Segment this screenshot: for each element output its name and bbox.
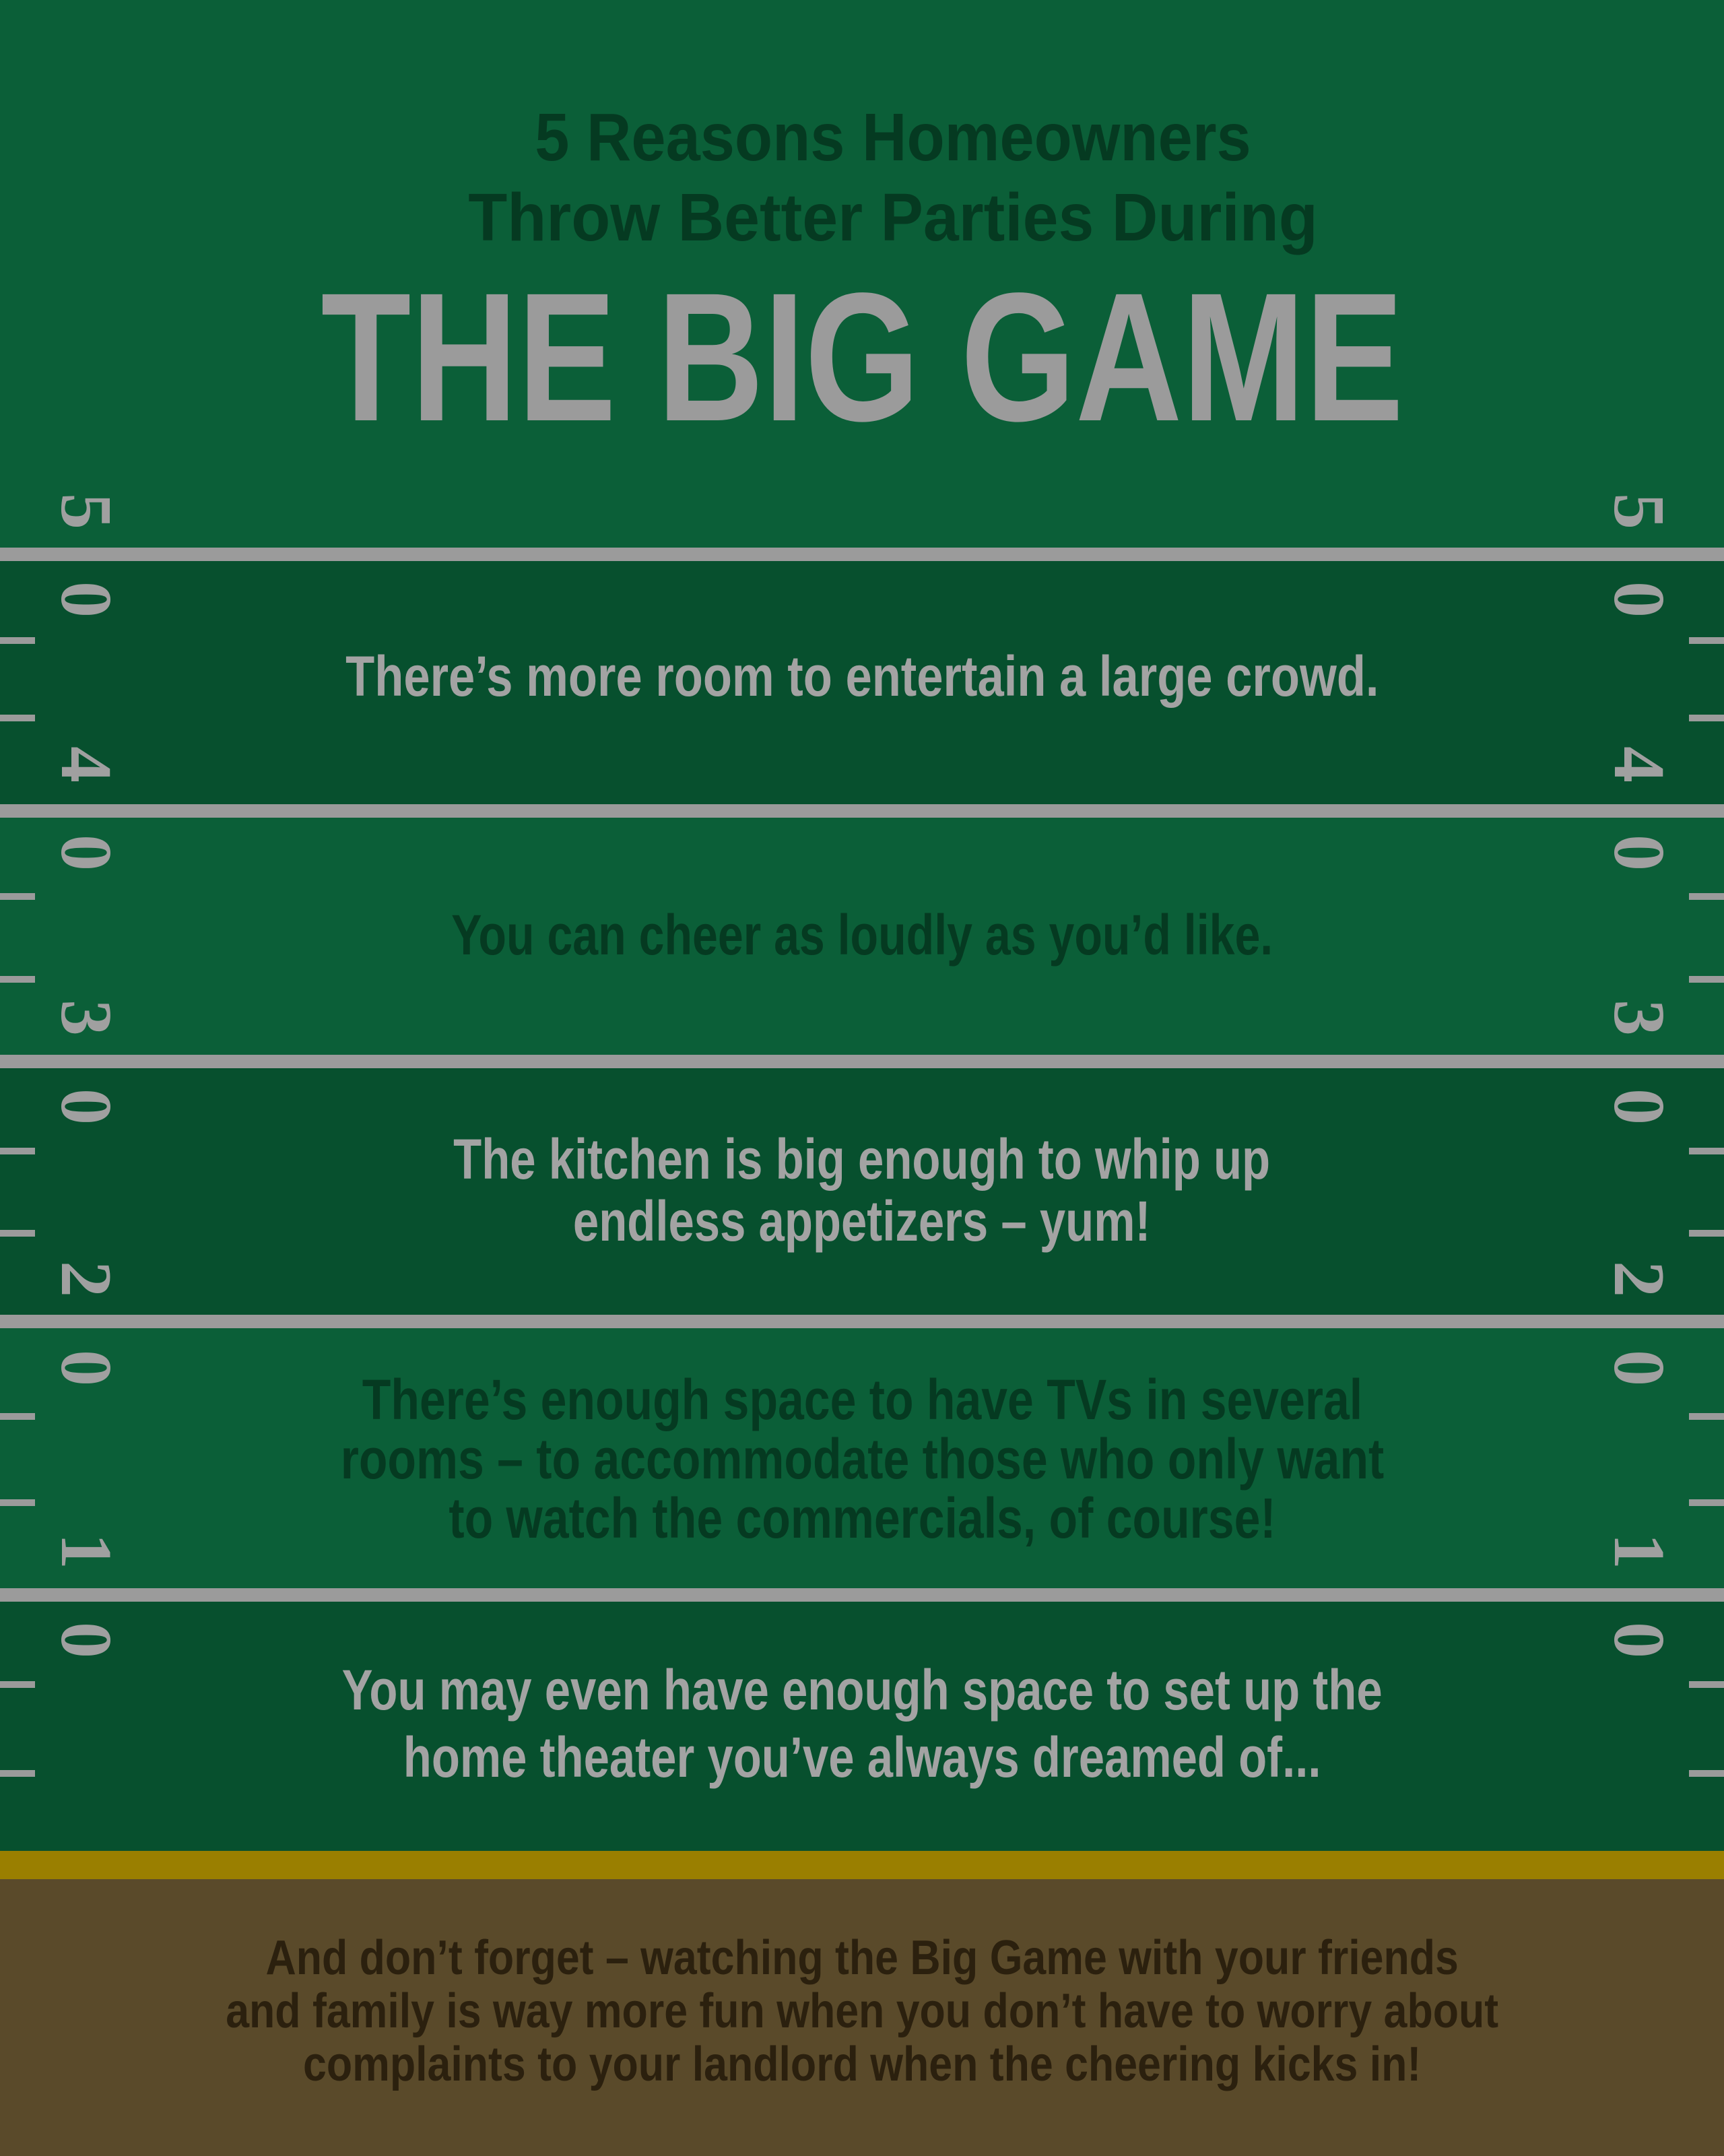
yard numbers left: 2 <box>46 1261 126 1297</box>
reason 2: You can cheer as loudly as you’d like. <box>451 903 1273 967</box>
reason 1: There’s more room to entertain a large crowd. <box>345 645 1379 708</box>
footer text: And don’t forget – watching the Big Game with your friends <box>265 1931 1459 1985</box>
panel: band 1 <box>0 561 1724 804</box>
panel: band 3 <box>0 1068 1724 1315</box>
yard numbers right: 0 <box>1599 1088 1679 1125</box>
yard numbers left: 5 <box>46 493 126 529</box>
yard numbers right <box>1599 493 1679 1658</box>
reason 5: home theater you’ve always dreamed of... <box>403 1726 1321 1789</box>
title line 2: Throw Better Parties During <box>468 180 1318 255</box>
yard numbers left: 4 <box>46 746 126 783</box>
reason 4 <box>340 1368 1384 1550</box>
panel: yellow goal line <box>0 1851 1724 1879</box>
yard numbers right: 3 <box>1599 1000 1679 1036</box>
yard numbers left: 1 <box>46 1533 126 1569</box>
footer text: complaints to your landlord when the cheering kicks in! <box>303 2037 1421 2091</box>
yard numbers left: 0 <box>46 1088 126 1125</box>
yard numbers right: 2 <box>1599 1261 1679 1297</box>
yard numbers right: 4 <box>1599 746 1679 783</box>
reason 4: rooms – to accommodate those who only want <box>340 1427 1384 1491</box>
yard numbers left: 0 <box>46 835 126 871</box>
title line 1: 5 Reasons Homeowners <box>535 100 1251 175</box>
footer text: and family is way more fun when you don’t have to worry about <box>226 1984 1498 2038</box>
yard numbers right: 1 <box>1599 1533 1679 1569</box>
yard numbers right: 0 <box>1599 1350 1679 1386</box>
panel: band 2 <box>0 818 1724 1055</box>
panel: band 5 <box>0 1602 1724 1851</box>
hash marks left <box>0 637 35 1777</box>
yard numbers left: 0 <box>46 1350 126 1386</box>
yard numbers left: 0 <box>46 581 126 618</box>
reason 4: to watch the commercials, of course! <box>449 1487 1275 1550</box>
footer text <box>226 1931 1498 2091</box>
hash marks right <box>1689 637 1724 1777</box>
yard numbers left: 0 <box>46 1622 126 1658</box>
reason 4: There’s enough space to have TVs in several <box>362 1368 1362 1431</box>
reason 3: The kitchen is big enough to whip up <box>453 1128 1271 1191</box>
panel: footer <box>0 1879 1724 2156</box>
yard numbers right: 0 <box>1599 835 1679 871</box>
panel: top header field <box>0 0 1724 548</box>
reason 3 <box>453 1128 1271 1253</box>
panel: band 4 <box>0 1328 1724 1588</box>
reason 3: endless appetizers – yum! <box>573 1189 1151 1253</box>
yard numbers right: 0 <box>1599 581 1679 618</box>
yard numbers right: 0 <box>1599 1622 1679 1658</box>
yard numbers right: 5 <box>1599 493 1679 529</box>
reason 5: You may even have enough space to set up the <box>341 1658 1383 1722</box>
yard numbers left: 3 <box>46 1000 126 1036</box>
yard numbers left <box>46 493 126 1658</box>
title: THE BIG GAME: THE BIG GAME <box>321 255 1403 459</box>
reason 5 <box>341 1658 1383 1789</box>
